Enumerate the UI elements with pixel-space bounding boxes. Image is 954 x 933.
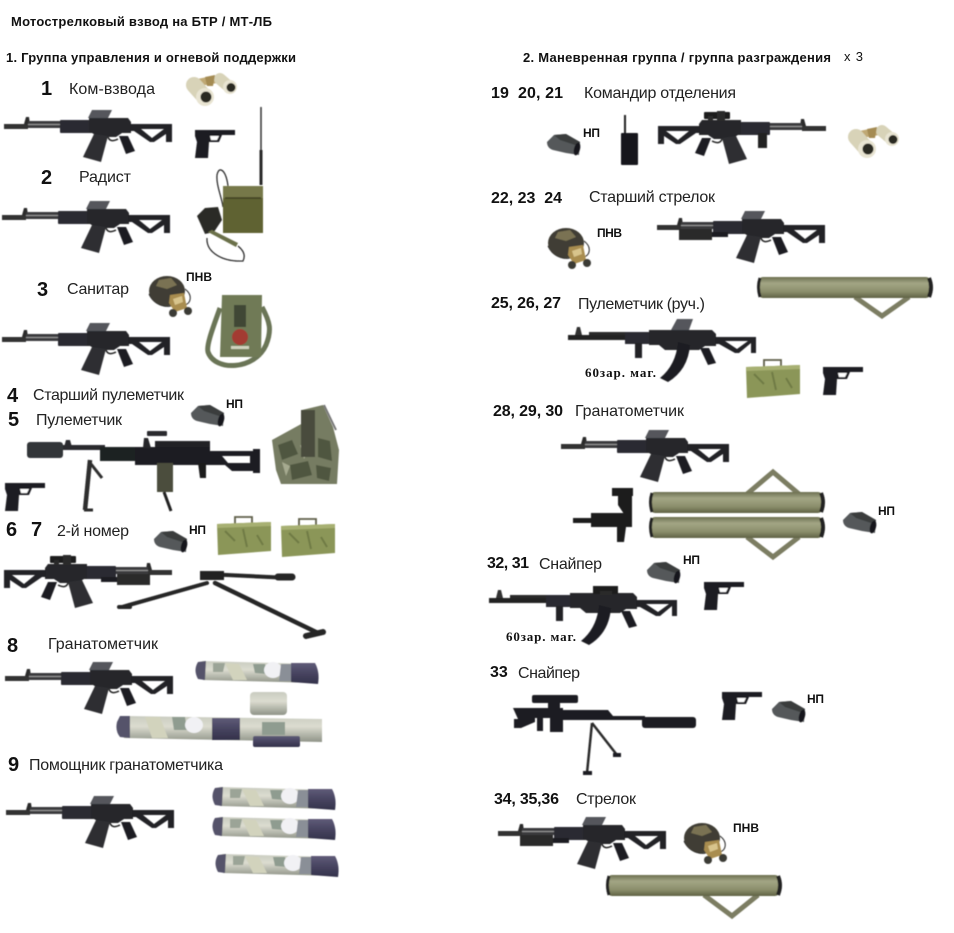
soldier 33 sniper: [490, 664, 824, 775]
number 4: 4: [7, 385, 19, 407]
icon: assault rifle: [2, 201, 170, 253]
label: light machine gunner: Пулеметчик (руч.): [578, 296, 705, 313]
icon: binoculars: [856, 127, 899, 158]
icon: handheld radio: [621, 115, 638, 165]
icon: grenade tube: [196, 661, 319, 684]
label: machine gunner: Пулеметчик: [36, 412, 123, 429]
icon: scoped rifle with foregrip: [658, 111, 826, 164]
icon: pistol: [5, 483, 45, 511]
label: radio operator: Радист: [79, 169, 132, 186]
icon: ammunition vest: [272, 405, 339, 484]
icon: rocket launcher tube: [607, 875, 780, 916]
icon: scoped light machine gun: [489, 586, 677, 645]
soldier 9 assistant grenadier: [6, 754, 339, 877]
number 9: 9: [8, 754, 19, 776]
soldiers 32 and 31 marksman: [487, 553, 744, 645]
label: senior rifleman: Старший стрелок: [589, 189, 716, 206]
label: night vision device: ПНВ: [186, 270, 212, 284]
soldiers 4 and 5 machine gunners: [5, 385, 339, 511]
icon: night vision helmet: [149, 276, 192, 317]
label: rifleman: Стрелок: [576, 791, 637, 808]
icon: night scope: [843, 512, 878, 534]
icon: night vision helmet: [548, 228, 591, 269]
icon: assault rifle: [4, 110, 172, 162]
panel: group 1 command and fire support: [2, 50, 339, 877]
label: marksman: Снайпер: [539, 556, 602, 573]
number 33: 33: [490, 664, 508, 681]
icon: light machine gun: [568, 319, 756, 382]
label: grenadier: Гранатометчик: [575, 403, 685, 420]
icon: night scope: [647, 562, 682, 584]
label: 60 round magazine: 60зар. маг.: [506, 629, 576, 644]
icon: pistol: [704, 582, 744, 610]
label: night scope: НП: [878, 504, 895, 518]
label: medic: Санитар: [67, 281, 129, 298]
icon: grenade launcher with sight: [116, 692, 322, 747]
label: second crew member: 2-й номер: [57, 523, 129, 540]
label: night vision device: ПНВ: [597, 226, 622, 240]
soldier 2 radio operator: [2, 107, 263, 261]
soldier 3 medic: [2, 270, 269, 375]
label: grenadier: Гранатометчик: [48, 636, 159, 653]
label: squad leader: Командир отделения: [584, 85, 736, 102]
label: senior machine gunner: Старший пулеметчик: [33, 387, 185, 404]
soldier 1 platoon commander: [4, 75, 237, 162]
numbers 22 23 24: 22, 23 24: [491, 190, 562, 207]
icon: launcher with sight: [573, 488, 633, 542]
label: night vision device: ПНВ: [733, 821, 759, 835]
icon: pistol: [195, 130, 235, 158]
number 8: 8: [7, 635, 18, 657]
label: night scope: НП: [683, 553, 700, 567]
soldier 8 grenadier: [5, 635, 322, 747]
icon: ammunition box: [281, 519, 335, 557]
icon: night vision helmet: [684, 823, 727, 864]
label: night scope: НП: [226, 397, 243, 411]
icon: pistol: [722, 692, 762, 720]
numbers 34 35 36: 34, 35,36: [494, 791, 559, 808]
icon: binoculars: [194, 75, 237, 106]
page title: Мотострелковый взвод на БТР / МТ-ЛБ: [11, 14, 272, 29]
number 1: 1: [41, 78, 52, 100]
icon: sniper rifle with bipod: [513, 695, 696, 775]
soldiers 28 to 30 grenadier: [493, 403, 895, 557]
icon: grenade tube: [212, 817, 336, 840]
soldiers 25 to 27 light machine gunner: [491, 295, 863, 398]
icon: ammunition box: [217, 517, 271, 555]
icon: assault rifle: [5, 662, 173, 714]
heading: group 2: 2. Маневренная группа / группа разграждения: [523, 50, 831, 65]
icon: pistol: [823, 367, 863, 395]
icon: medical bag: [208, 295, 269, 366]
soldiers 19 to 21 squad leader: [491, 85, 899, 165]
icon: rifle with grenade launcher: [498, 817, 666, 869]
label: platoon commander: Ком-взвода: [69, 81, 155, 98]
number 2: 2: [41, 167, 52, 189]
number 5: 5: [8, 409, 19, 431]
icon: grenade tube: [212, 787, 336, 810]
label: night scope: НП: [583, 126, 600, 140]
icon: assault rifle: [2, 323, 170, 375]
number 7: 7: [31, 519, 42, 541]
icon: rocket launcher tube: [650, 472, 823, 513]
panel: group 2 manoeuvre and obstacle group: [487, 49, 931, 916]
numbers 28 29 30: 28, 29, 30: [493, 403, 563, 420]
soldiers 22 to 24 senior rifleman: [491, 189, 931, 316]
multiplier x 3: x 3: [844, 49, 863, 64]
number 3: 3: [37, 279, 48, 301]
icon: rifle with scope and grenade launcher: [4, 555, 172, 608]
icon: night scope: [154, 531, 189, 553]
icon: night scope: [547, 134, 582, 156]
icon: machine gun with bipod: [27, 431, 260, 511]
label: assistant grenadier: Помощник гранатометчика: [29, 757, 223, 774]
icon: tripod: [119, 571, 323, 636]
numbers 32 31: 32, 31: [487, 555, 529, 572]
label: night scope: НП: [807, 692, 824, 706]
soldiers 34 to 36 rifleman: [494, 791, 780, 916]
icon: rifle with grenade launcher: [657, 211, 825, 263]
icon: assault rifle: [561, 430, 729, 482]
icon: night scope: [191, 405, 226, 427]
label: night scope: НП: [189, 523, 206, 537]
icon: grenade tube: [216, 854, 339, 877]
soldiers 6 and 7 second crew member: [4, 517, 335, 636]
icon: night scope: [772, 701, 807, 723]
label: sniper: Снайпер: [518, 665, 580, 682]
numbers 19 20 21: 19 20, 21: [491, 85, 563, 102]
number 6: 6: [6, 519, 17, 541]
icon: rocket launcher tube: [650, 517, 823, 557]
numbers 25 26 27: 25, 26, 27: [491, 295, 561, 312]
icon: assault rifle: [6, 796, 174, 848]
icon: ammunition box: [746, 360, 800, 398]
heading: group 1: 1. Группа управления и огневой поддержки: [6, 50, 296, 65]
icon: rocket launcher tube: [758, 277, 931, 316]
label: 60 round magazine: 60зар. маг.: [585, 365, 656, 380]
icon: field radio set: [197, 107, 263, 261]
